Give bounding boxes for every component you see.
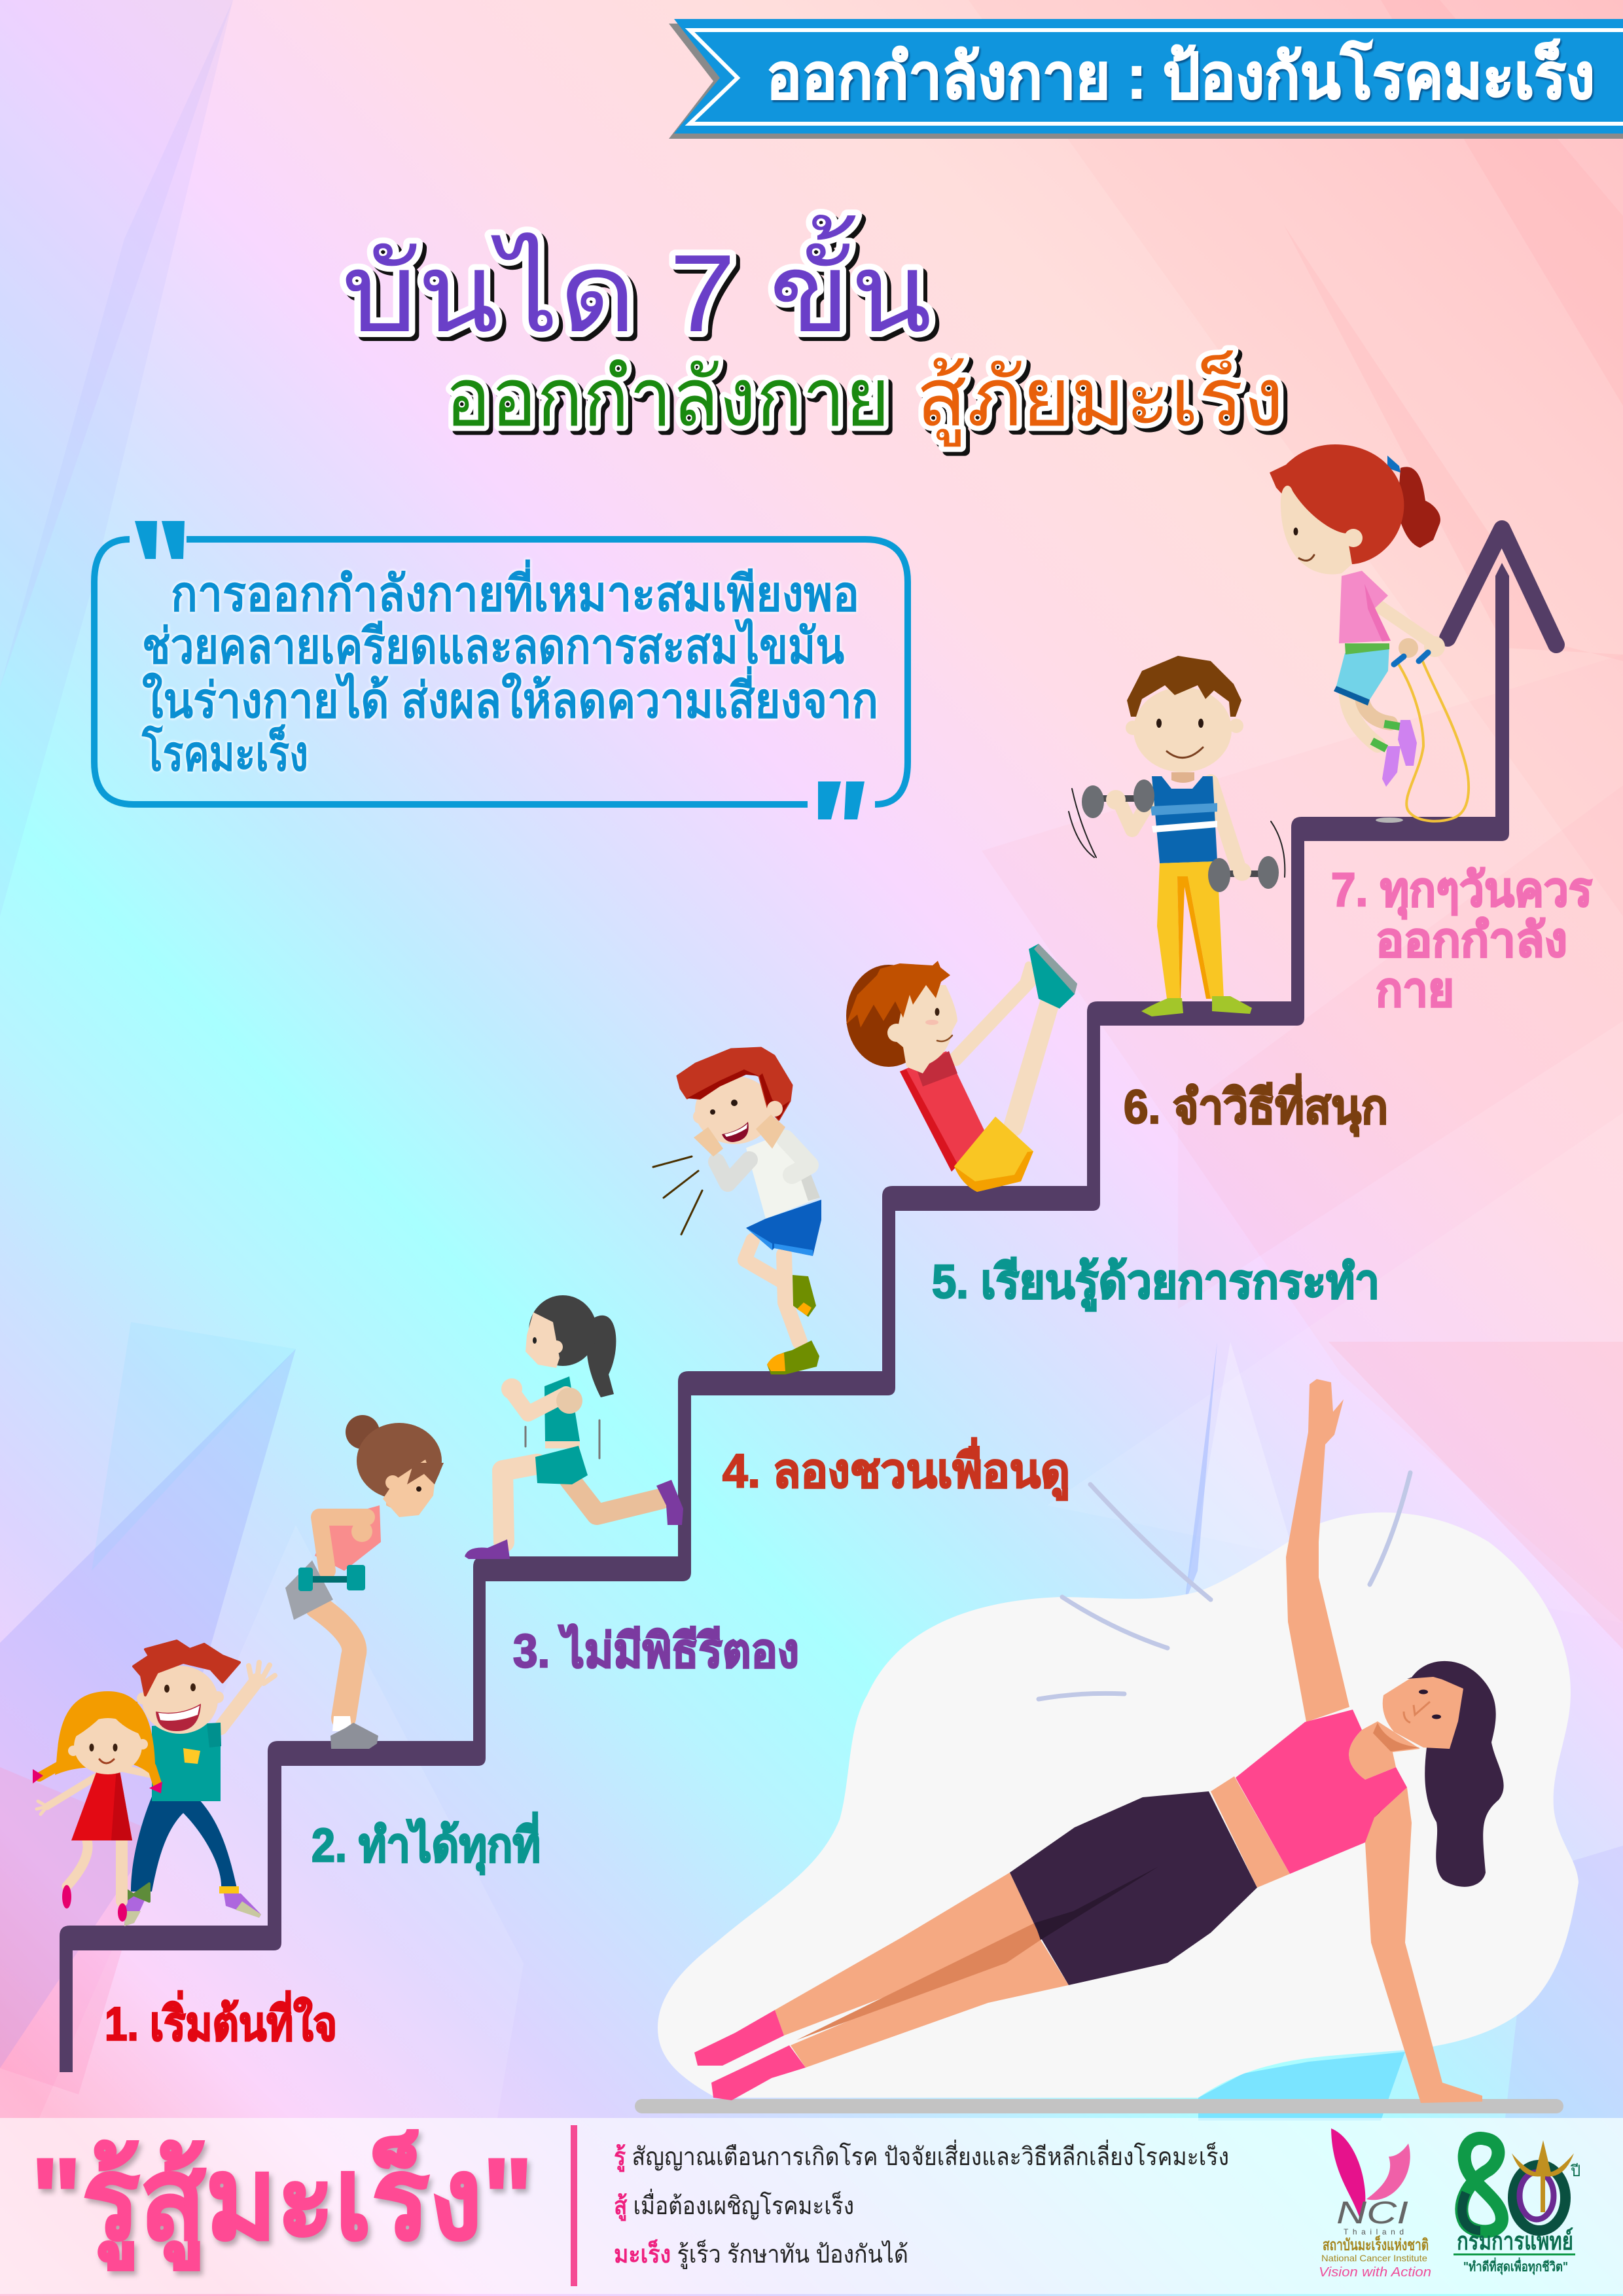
motion lines around woman [1039, 1473, 1410, 1699]
step 4 label: 4. ลองชวนเพื่อนดู [722, 1437, 1070, 1501]
legs [694, 1873, 1069, 2100]
logo: department of medical services 80 years [1454, 2138, 1580, 2275]
raised arm [1286, 1379, 1349, 1722]
shorts [1010, 1791, 1257, 1985]
waist [1211, 1776, 1290, 1888]
top [1236, 1710, 1407, 1874]
logo: department of medical services 80 years: กรมการแพทย์ [1457, 2227, 1573, 2255]
callout text: การออกกำลังกายที่เหมาะสมเพียงพอ [171, 560, 859, 621]
step 7 label: ออกกำลัง [1376, 914, 1567, 967]
illustration: runner on step 3 [465, 1295, 683, 1559]
step 7 label: กาย [1376, 964, 1454, 1016]
step 5 label: 5. เรียนรู้ด้วยการกระทำ [932, 1256, 1380, 1312]
logo: national cancer institute: Thailand [1344, 2227, 1404, 2236]
illustration: woman in side plank [694, 1379, 1504, 2103]
logo: national cancer institute: National Cancer Institute [1321, 2253, 1427, 2263]
staircase with arrow [60, 529, 1556, 2072]
footer divider [571, 2125, 577, 2286]
neck and chest [1349, 1721, 1420, 1780]
support arm [1365, 1787, 1482, 2103]
footer band [0, 2118, 1623, 2294]
icon: closing quote mark [818, 781, 865, 819]
illustration: shouting boy on step 4 [653, 1048, 821, 1374]
icon: opening quote mark [135, 521, 185, 559]
logo: department of medical services 80 years: ปี [1570, 2162, 1580, 2180]
banner title text: ออกกำลังกาย : ป้องกันโรคมะเร็ง [766, 39, 1595, 112]
logo: national cancer institute [1319, 2128, 1431, 2280]
face [1383, 1676, 1463, 1749]
step 7 label [1331, 864, 1592, 1016]
step 3 label: 3. ไม่มีพิธีรีตอง [513, 1623, 799, 1677]
white blob behind woman [658, 1513, 1578, 2098]
callout text: ในร่างกายได้ ส่งผลให้ลดความเสี่ยงจาก [142, 667, 878, 728]
heading: 7 steps: บันได 7 ขั้น [342, 215, 932, 355]
illustration: two children on step 1 [33, 1641, 275, 1926]
step labels [105, 864, 1592, 2051]
logo: national cancer institute: NCI [1336, 2196, 1408, 2231]
footer line 1: รู้ สัญญาณเตือนการเกิดโรค ปัจจัยเสี่ยงและวิธีหลีกเลี่ยงโรคมะเร็ง [614, 2140, 1229, 2172]
floor bar [635, 2099, 1563, 2113]
callout text [142, 560, 878, 781]
sub-heading: ออกกำลังกาย [445, 353, 890, 443]
logo: national cancer institute: Vision with Action [1319, 2265, 1431, 2280]
girl [33, 1691, 162, 1922]
hair [1412, 1661, 1504, 1887]
step 1 label: 1. เริ่มต้นที่ใจ [105, 1990, 337, 2051]
sub-heading: สู้ภัยมะเร็ง [916, 350, 1284, 446]
illustration: boy doing v-sit on step 5 [846, 944, 1077, 1192]
sub-heading [445, 350, 1284, 446]
step 7 label: 7. ทุกๆวันควร [1331, 864, 1592, 920]
footer slogan: "รู้สู้มะเร็ง" [31, 2130, 533, 2270]
illustration: girl jumping rope on step 7 [1270, 444, 1469, 823]
callout text: โรคมะเร็ง [142, 725, 308, 781]
logo: department of medical services 80 years: "ทำดีที่สุดเพื่อทุกชีวิต" [1463, 2257, 1568, 2275]
logo: national cancer institute: สถาบันมะเร็งแห่งชาติ [1323, 2235, 1429, 2254]
boy [119, 1641, 275, 1926]
step 6 label: 6. จำวิธีที่สนุก [1124, 1073, 1388, 1137]
step 2 label: 2. ทำได้ทุกที่ [312, 1812, 541, 1875]
panel: quote callout [94, 521, 908, 819]
illustration: woman with dumbbells on step 2 [285, 1415, 444, 1749]
banner: page title [669, 19, 1623, 139]
footer line 2: สู้ เมื่อต้องเผชิญโรคมะเร็ง [614, 2189, 854, 2221]
illustration: boy with dumbbells on step 6 [1069, 656, 1285, 1016]
callout text: ช่วยคลายเครียดและลดการสะสมไขมัน [142, 619, 844, 673]
footer line 3: มะเร็ง รู้เร็ว รักษาทัน ป้องกันได้ [614, 2239, 908, 2269]
